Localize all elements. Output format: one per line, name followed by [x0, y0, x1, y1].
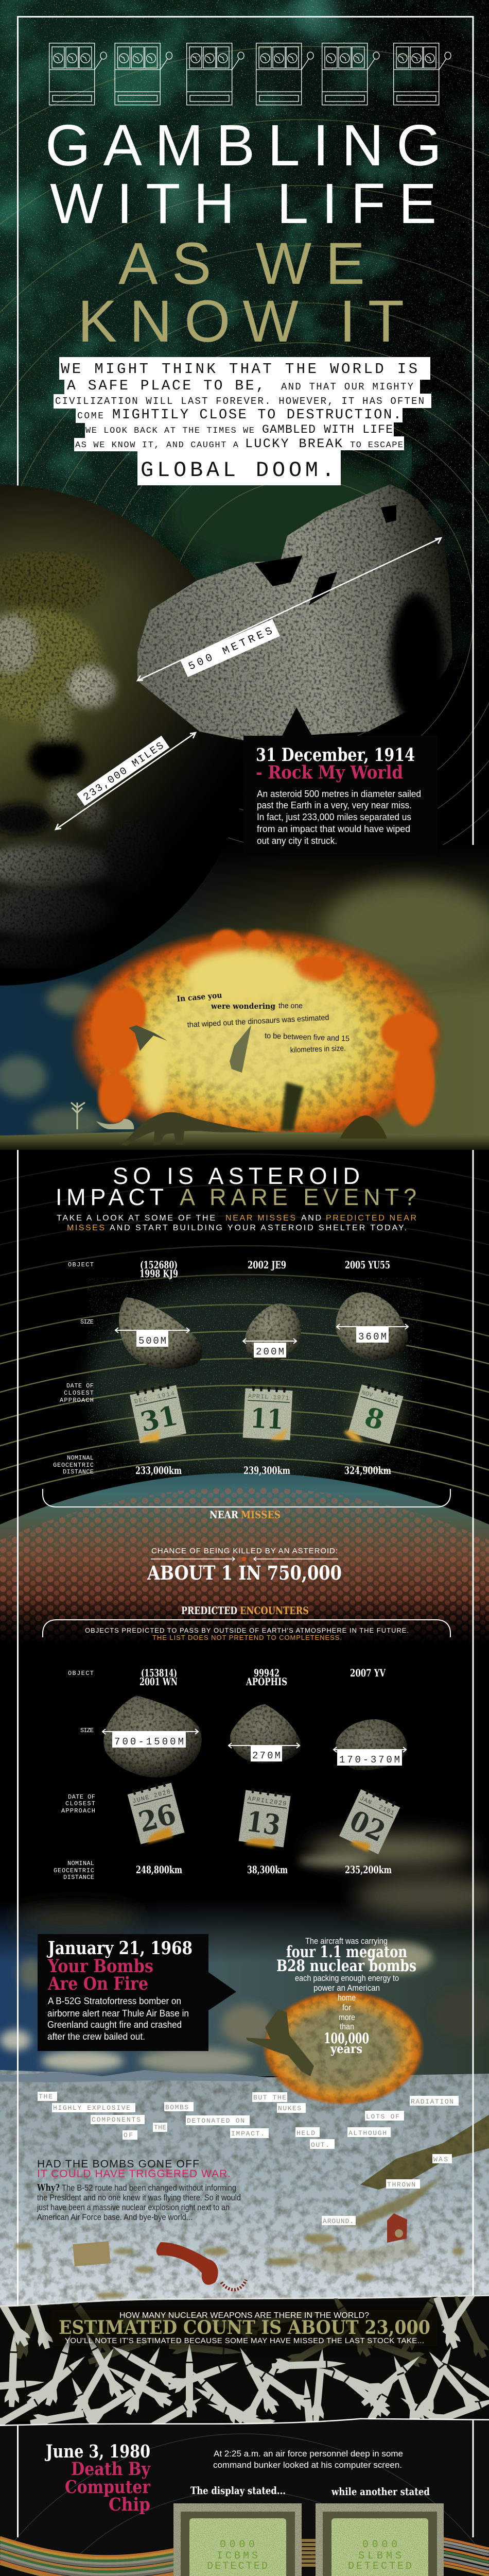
frame: lines over snow scene: [18, 1855, 473, 2307]
heading: so is asteroid impact a rare event: [56, 1163, 416, 1210]
arrow and label: 500 metres: [137, 538, 441, 681]
text block: had the bombs gone off: The B-52 route had been changed without informing: [62, 2183, 236, 2193]
background: computer chip section with target rings: [0, 2419, 489, 2576]
panel: January 21 1968: after the crew bailed out.: [47, 2031, 145, 2042]
panel: January 21 1968: [38, 1934, 236, 2051]
asteroids with size arrows: [115, 1292, 408, 1369]
earth horizon with dot texture: [0, 1473, 489, 1640]
panel: January 21 1968: airborne alert near Thule Air Base in: [47, 2008, 189, 2019]
heading: so is asteroid impact a rare event: SO IS ASTEROID: [113, 1163, 360, 1189]
icon: explosion ring and falling bomber: [246, 1990, 425, 2106]
text block: B28 nuclear bombs energy: B28 nuclear bombs: [276, 1957, 416, 1975]
text block: B28 nuclear bombs energy: for: [342, 2003, 351, 2012]
statistic: chance of being killed: [147, 1547, 342, 1584]
monitor: 0000 ICBMs detected: ICBMS: [217, 2550, 258, 2562]
earth globe: [0, 485, 250, 986]
calendar: 31 Dec 1914: [119, 1376, 197, 1453]
callout: 31 December 1914: out any city it struck.: [257, 836, 337, 846]
calendar: 11 April 1971: [229, 1376, 306, 1453]
sub heading: near misses intro: TAKE A LOOK AT SOME OF THE: [57, 1214, 215, 1223]
sub heading: near misses intro: AND START BUILDING YOUR ASTEROID SHELTER TODAY.: [110, 1224, 407, 1232]
object names: 2005 YU55: [345, 1259, 390, 1271]
word labels: scattered explosion sentence: LOTS OF: [366, 2113, 399, 2121]
row labels: GEOCENTRIC: [53, 1462, 94, 1469]
monitor: 0000 ICBMs detected: 0000: [220, 2539, 255, 2551]
callout: 31 December 1914: from an impact that would have wiped: [257, 824, 410, 834]
calendar: 11 April 1971: APRIL 1971: [248, 1393, 289, 1402]
text block: had the bombs gone off: HAD THE BOMBS GONE OFF: [37, 2158, 199, 2170]
icon: red telephone: [14, 2213, 464, 2298]
text block: B28 nuclear bombs energy: 100,000: [324, 2030, 369, 2047]
row labels: CLOSEST: [65, 1800, 95, 1807]
intro text on white strips: COME: [77, 411, 103, 421]
intro text on white strips: LUCKY BREAK: [245, 436, 342, 451]
callout: 31 December 1914: [243, 707, 438, 856]
icon: smoke column: [281, 1082, 304, 1131]
calendar: 02 Jan 2101: [338, 1787, 401, 1856]
word labels: scattered explosion sentence: [38, 2092, 459, 2225]
object names: 2001 WN: [139, 1675, 178, 1688]
object names: APOPHIS: [246, 1675, 287, 1688]
statistic: chance of being killed: ABOUT 1 IN 750,000: [147, 1562, 342, 1584]
object names: 99942: [254, 1667, 280, 1679]
callout: 31 December 1914: - Rock My World: [256, 762, 403, 783]
panel: January 21 1968: A B-52G Stratofortress bomber on: [48, 1996, 181, 2006]
calendar: 31 Dec 1914: 31: [137, 1400, 181, 1438]
title: AS WE: [118, 231, 365, 297]
statistic: chance of being killed: CHANCE OF BEING KILLED BY AN ASTEROID:: [151, 1547, 338, 1555]
row labels: SIZE: [80, 1318, 94, 1326]
callout: 31 December 1914: 31 December, 1914: [256, 744, 415, 766]
bracket: predicted encounters: OBJECTS PREDICTED TO PASS BY OUTSIDE OF EARTH'S ATMOSPHERE IN THE FUTURE.: [85, 1626, 409, 1634]
distances: 38,300km: [247, 1863, 288, 1876]
distances: [136, 1863, 392, 1876]
sub heading: near misses intro: NEAR MISSES: [225, 1214, 295, 1223]
calendar: 13 April 2029: APRIL2029: [247, 1795, 287, 1808]
text block: B28 nuclear bombs energy: more: [339, 2012, 355, 2022]
heading: so is asteroid impact a rare event: A RARE EVENT?: [180, 1184, 416, 1210]
intro text on white strips: A SAFE PLACE TO BE,: [67, 378, 265, 394]
text block: bunker intro: The display stated...: [190, 2484, 286, 2497]
table: near misses: [53, 1259, 414, 1476]
background: Thule sky with clouds: [0, 1824, 489, 2076]
text block: bunker intro: [190, 2449, 430, 2498]
object names: [139, 1667, 386, 1688]
asteroids with size arrows: 170-370M: [339, 1754, 400, 1766]
sub heading: near misses intro: [57, 1214, 416, 1232]
row labels: APPROACH: [60, 1397, 94, 1404]
heading: June 3 1980: Computer: [65, 2477, 150, 2498]
row labels: OBJECT: [68, 1670, 94, 1677]
panel: nuclear weapons missile pile: HOW MANY NUCLEAR WEAPONS ARE THERE IN THE WORLD?: [119, 2311, 369, 2320]
row labels: APPROACH: [61, 1807, 95, 1815]
word labels: scattered explosion sentence: BOMBS: [165, 2104, 188, 2111]
monitor: 0000 ICBMs detected: DETECTED: [207, 2561, 268, 2572]
text block: had the bombs gone off: American Air Force base. And bye-bye world...: [37, 2212, 193, 2222]
intro text on white strips: AND THAT OUR MIGHTY: [281, 381, 414, 393]
sub heading: near misses intro: MISSES: [67, 1224, 104, 1232]
icon: large asteroid: [137, 484, 452, 740]
monitor: 0000 SLBMs detected: [316, 2503, 444, 2576]
object names: 2002 JE9: [248, 1259, 286, 1271]
intro text on white strips: TO ESCAPE: [350, 440, 403, 450]
text block: bunker intro: while another stated: [331, 2485, 430, 2498]
monitor: 0000 ICBMs detected: [173, 2503, 302, 2576]
arrow and label: 233,000 miles: [56, 733, 196, 829]
title: GAMBLING: [45, 113, 442, 178]
text block: had the bombs gone off: IT COULD HAVE TRIGGERED WAR.: [37, 2168, 231, 2180]
callout: 31 December 1914: In fact, just 233,000 miles separated us: [257, 812, 411, 822]
background: green nebula and orbit lines: [0, 0, 489, 1180]
bracket: near misses: MISSES: [241, 1509, 281, 1521]
panel: January 21 1968: Greenland caught fire and crashed: [47, 2020, 182, 2030]
object names: 1998 KJ9: [139, 1267, 178, 1280]
calendar: 13 April 2029: 13: [244, 1804, 283, 1842]
text block: dinosaur asteroid fact: that wiped out the dinosaurs was estimated: [187, 1013, 329, 1029]
word labels: scattered explosion sentence: RADIATION: [411, 2098, 453, 2106]
intro text on white strips: GAMBLED WITH LIFE: [262, 423, 393, 436]
text block: B28 nuclear bombs energy: home: [338, 1993, 356, 2003]
text block: had the bombs gone off: just have been a massive nuclear explosion right next to an: [37, 2202, 230, 2212]
calendar: 02 Jan 2101: JAN 2101: [359, 1795, 395, 1817]
text block: had the bombs gone off: Why?: [37, 2182, 60, 2193]
word labels: scattered explosion sentence: IMPACT.: [231, 2130, 265, 2138]
word labels: scattered explosion sentence: HELD: [296, 2129, 315, 2137]
intro text on white strips: WE LOOK BACK AT THE TIMES WE: [85, 426, 254, 436]
object names: [139, 1259, 390, 1280]
object names: 2007 YV: [350, 1667, 386, 1679]
text block: bunker intro: At 2:25 a.m. an air force personnel deep in some: [214, 2449, 403, 2459]
object names: (152680): [140, 1259, 178, 1271]
row labels: [54, 1670, 95, 1881]
intro text on white strips: WE MIGHT THINK THAT THE WORLD IS: [61, 361, 417, 378]
intro text on white strips: GLOBAL DOOM.: [141, 458, 335, 483]
table labels: distances near misses: 233,000km: [135, 1464, 182, 1477]
icons: six slot machines with globes: [49, 43, 451, 105]
asteroids with size arrows: 360M: [358, 1331, 387, 1343]
text block: B28 nuclear bombs energy: The aircraft was carrying: [305, 1936, 388, 1946]
intro text on white strips: CIVILIZATION WILL LAST FOREVER. HOWEVER, IT HAS OFTEN: [55, 396, 424, 407]
calendar: 02 Jan 2101: 02: [345, 1804, 391, 1849]
frame: lines over earth horizon: [18, 1473, 473, 1855]
text block: B28 nuclear bombs energy: than: [340, 2022, 354, 2031]
table labels: distances near misses: 324,900km: [344, 1464, 391, 1477]
bracket: near misses: [43, 1489, 450, 1521]
background: orbit arcs and starfield for near misses: [0, 1150, 489, 2576]
heading: so is asteroid impact a rare event: IMPACT: [56, 1184, 164, 1210]
asteroids with size arrows: 200M: [256, 1346, 284, 1358]
panel: nuclear weapons missile pile: ESTIMATED COUNT IS ABOUT 23,000: [59, 2317, 430, 2338]
calendar: 26 June 2028: 26: [135, 1797, 179, 1839]
row labels: CLOSEST: [64, 1389, 94, 1397]
panel: January 21 1968: Are On Fire: [47, 1973, 148, 1994]
asteroids with size arrows: [102, 1696, 407, 1777]
word labels: scattered explosion sentence: OF: [124, 2131, 133, 2139]
background: dinosaur explosion sky: [0, 845, 489, 1154]
asteroids with size arrows: 700-1500M: [114, 1736, 184, 1748]
bracket: near misses: NEAR: [209, 1509, 238, 1521]
calendar: 8 Nov 2011: NOV 2011: [361, 1389, 399, 1406]
heading: June 3 1980: [45, 2441, 151, 2515]
row labels: OBJECT: [68, 1261, 94, 1268]
bracket: predicted encounters: THE LIST DOES NOT PRETEND TO COMPLETENESS.: [152, 1634, 342, 1641]
word labels: scattered explosion sentence: OUT.: [311, 2141, 329, 2149]
word labels: scattered explosion sentence: DETONATED ON: [187, 2117, 244, 2125]
word labels: scattered explosion sentence: THROWN: [387, 2181, 415, 2189]
text block: had the bombs gone off: the President and no one knew it was flying there. So it would: [37, 2193, 241, 2202]
arrow and label: 500 metres: 500 METRES: [187, 625, 274, 673]
word labels: scattered explosion sentence: COMPONENTS: [92, 2116, 141, 2124]
intro text on white strips: [54, 357, 431, 485]
front layer of white missiles: [0, 2268, 489, 2454]
row labels: [53, 1261, 94, 1476]
background: black below horizon: [0, 1643, 489, 1850]
text block: dinosaur asteroid fact: kilometres in size.: [290, 1044, 346, 1055]
bracket: predicted encounters: [43, 1604, 450, 1641]
row labels: NOMINAL: [67, 1860, 94, 1867]
title: [45, 113, 442, 354]
text block: B28 nuclear bombs energy: years: [330, 2041, 362, 2056]
text block: dinosaur asteroid fact: were wondering: [211, 1002, 275, 1011]
calendar: 31 Dec 1914: DEC 1914: [134, 1390, 176, 1405]
icon: ribbon cables: [0, 2537, 489, 2576]
intro text on white strips: AS WE KNOW IT, AND CAUGHT A: [75, 440, 239, 450]
word labels: scattered explosion sentence: BUT THE: [253, 2094, 286, 2102]
word labels: scattered explosion sentence: THE: [39, 2093, 53, 2100]
word labels: scattered explosion sentence: THE: [154, 2124, 166, 2131]
text block: dinosaur asteroid fact: the one: [278, 1002, 303, 1010]
row labels: DISTANCE: [63, 1468, 94, 1476]
row labels: DATE OF: [68, 1793, 95, 1801]
text block: dinosaur asteroid fact: to be between five and 15: [265, 1031, 350, 1043]
panel: January 21 1968: January 21, 1968: [46, 1938, 193, 1959]
calendar: 26 June 2028: [127, 1780, 185, 1845]
panel: January 21 1968: Your Bombs: [47, 1956, 153, 1977]
text block: dinosaur asteroid fact: In case you: [177, 990, 222, 1004]
sub heading: near misses intro: AND: [301, 1214, 321, 1223]
monitor: 0000 SLBMs detected: DETECTED: [348, 2561, 412, 2572]
monitor: 0000 SLBMs detected: 0000: [362, 2539, 397, 2551]
calendar: 26 June 2028: JUNE 2028: [132, 1788, 171, 1805]
arrow and label: 233,000 miles: 233,000 MILES: [81, 740, 166, 804]
panel: nuclear weapons missile pile: YOU'LL NOTE IT'S ESTIMATED BECAUSE SOME MAY HAVE MISSED THE LAST STOCK TAKE...: [65, 2336, 424, 2345]
rocks on the snow: [14, 2233, 464, 2298]
callout: 31 December 1914: past the Earth in a very, very near miss.: [257, 800, 412, 810]
text block: B28 nuclear bombs energy: four 1.1 megaton: [286, 1943, 407, 1961]
text block: dinosaur asteroid fact: [177, 990, 350, 1055]
table: predicted encounters: [54, 1667, 407, 1881]
word labels: scattered explosion sentence: WAS: [433, 2156, 448, 2163]
sub heading: near misses intro: PREDICTED NEAR: [326, 1214, 416, 1223]
text block: had the bombs gone off: [37, 2158, 241, 2222]
text block: B28 nuclear bombs energy: each packing enough energy to: [295, 1973, 399, 1983]
panel: nuclear weapons missile pile: [0, 2295, 489, 2426]
asteroids with size arrows: 270M: [252, 1750, 281, 1761]
heading: June 3 1980: Chip: [109, 2494, 150, 2515]
word labels: scattered explosion sentence: NUKES: [278, 2105, 301, 2112]
table labels: distances near misses: 239,300km: [243, 1464, 290, 1477]
heading: June 3 1980: June 3, 1980: [45, 2441, 150, 2462]
back layer of dim missiles: [16, 2296, 489, 2369]
bracket: predicted encounters: PREDICTED: [181, 1604, 237, 1617]
calendar: 8 Nov 2011: 8: [361, 1401, 388, 1436]
text block: B28 nuclear bombs energy: [276, 1936, 416, 2056]
bracket: predicted encounters: ENCOUNTERS: [240, 1604, 309, 1617]
title: WITH LIFE: [50, 172, 436, 235]
text block: B28 nuclear bombs energy: power an American: [313, 1983, 380, 1993]
row labels: GEOCENTRIC: [54, 1867, 94, 1874]
word labels: scattered explosion sentence: ALTHOUGH: [348, 2129, 387, 2137]
row labels: DISTANCE: [63, 1874, 94, 1881]
title: KNOW IT: [78, 289, 404, 354]
distances: 235,200km: [345, 1863, 392, 1876]
monitor: 0000 SLBMs detected: SLBMS: [358, 2550, 401, 2562]
frame: left and right lines over black area: [18, 1150, 473, 1665]
distances: 248,800km: [136, 1863, 182, 1876]
object names: (153814): [141, 1667, 177, 1679]
callout: 31 December 1914: An asteroid 500 metres in diameter sailed: [257, 789, 421, 799]
row labels: NOMINAL: [67, 1454, 94, 1462]
ground and dinosaur silhouettes: [0, 1025, 489, 1154]
calendar: 11 April 1971: 11: [250, 1402, 284, 1436]
heading: June 3 1980: Death By: [71, 2459, 151, 2480]
table labels: distances near misses: [135, 1464, 391, 1477]
intro text on white strips: MIGHTILY CLOSE TO DESTRUCTION.: [112, 408, 401, 423]
row labels: SIZE: [80, 1727, 94, 1734]
row labels: DATE OF: [66, 1382, 94, 1389]
word labels: scattered explosion sentence: AROUND.: [323, 2217, 354, 2225]
background: snowfield: [0, 2070, 489, 2308]
calendar: 8 Nov 2011: [337, 1376, 414, 1453]
word labels: scattered explosion sentence: HIGHLY EXPLOSIVE: [53, 2104, 130, 2112]
calendar: 13 April 2029: [238, 1787, 291, 1850]
text block: bunker intro: command bunker looked at his computer screen.: [213, 2460, 402, 2470]
asteroids with size arrows: 500M: [138, 1335, 166, 1347]
